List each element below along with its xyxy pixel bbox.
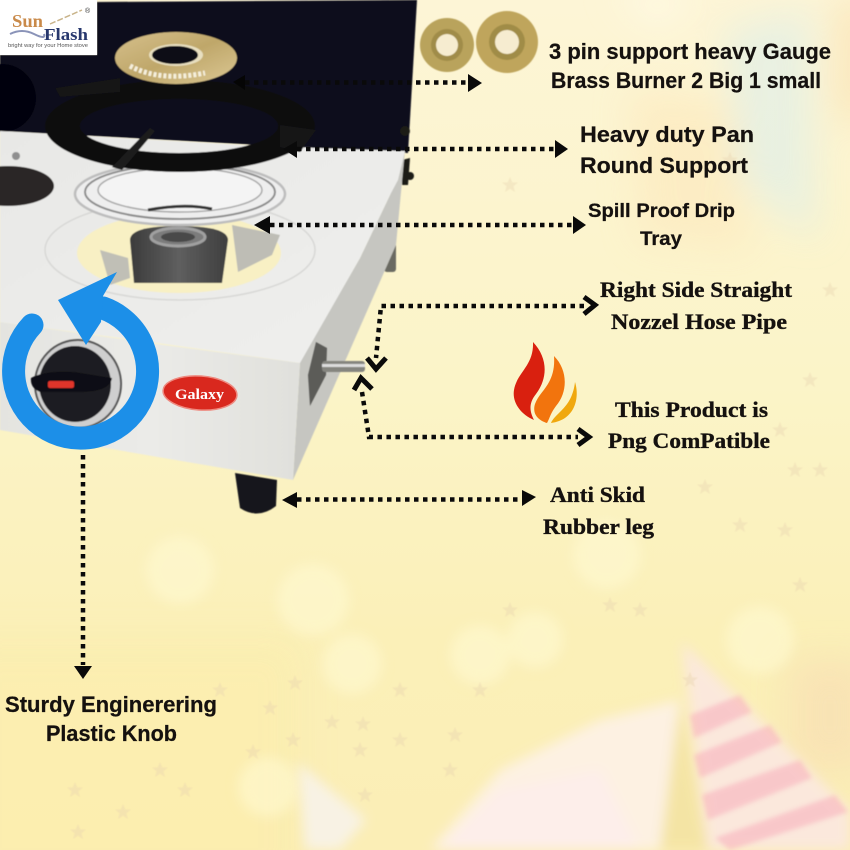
logo: Sun Flash: Sun — [12, 11, 43, 31]
label: plastic knob: Sturdy Enginerering — [5, 692, 217, 717]
arrow: plastic knob — [74, 455, 92, 679]
logo: Sun Flash — [0, 0, 97, 55]
drip tray — [75, 163, 285, 225]
label: brass burner: 3 pin support heavy Gauge — [549, 39, 831, 64]
product photo: gas stove — [0, 0, 417, 514]
left burner hole — [0, 152, 54, 206]
right side face — [293, 150, 405, 480]
label: rubber leg: Anti Skid — [550, 482, 645, 507]
icon: small brass burners — [420, 11, 538, 73]
label: PNG compatible: This Product is — [615, 397, 768, 422]
logo: Sun Flash: Flash — [44, 25, 89, 44]
label: drip tray: Tray — [640, 229, 682, 250]
label: plastic knob — [5, 692, 217, 746]
dark glass back panel — [0, 0, 417, 153]
label: rubber leg: Rubber leg — [543, 514, 654, 539]
burner cut-out — [45, 200, 315, 300]
arrow: brass burner — [233, 74, 482, 92]
panel side bolts — [400, 126, 414, 185]
label: rubber leg — [543, 482, 654, 539]
logo: Sun Flash: ® — [85, 7, 91, 15]
label: nozzle hose pipe: Right Side Straight — [600, 277, 793, 302]
label: nozzle hose pipe — [600, 277, 793, 334]
gas nozzle — [308, 342, 365, 406]
pan support ring — [45, 78, 316, 172]
label: pan support: Heavy duty Pan — [580, 122, 754, 147]
label: brass burner — [549, 39, 831, 93]
arrow: nozzle hose pipe — [367, 297, 595, 369]
burner cap — [130, 226, 228, 283]
arrow: rubber leg — [282, 490, 536, 508]
label: PNG compatible — [608, 397, 770, 453]
label: drip tray — [588, 201, 735, 250]
icon: flame — [514, 342, 577, 423]
icon: blue rotation arrow — [14, 272, 148, 438]
panel shadow circle — [0, 64, 36, 132]
arrow: drip tray — [254, 216, 586, 234]
brass burner — [115, 32, 237, 84]
label: pan support — [580, 122, 754, 178]
Galaxy badge: Galaxy — [175, 387, 225, 403]
label: drip tray: Spill Proof Drip — [588, 201, 735, 222]
front rubber leg — [235, 473, 277, 514]
label: pan support: Round Support — [580, 153, 749, 178]
knob — [31, 340, 121, 428]
label: brass burner: Brass Burner 2 Big 1 small — [551, 68, 821, 93]
rear stove leg — [384, 240, 396, 272]
logo: Sun Flash: bright way for your Home stove — [8, 43, 88, 49]
Galaxy badge — [162, 373, 238, 413]
front face — [0, 322, 300, 480]
stove top surface — [0, 131, 405, 363]
label: PNG compatible: Png ComPatible — [608, 428, 770, 453]
arrow: PNG compatible — [354, 378, 589, 445]
label: nozzle hose pipe: Nozzel Hose Pipe — [611, 309, 787, 334]
label: plastic knob: Plastic Knob — [46, 721, 177, 746]
arrow: pan support — [283, 140, 568, 158]
